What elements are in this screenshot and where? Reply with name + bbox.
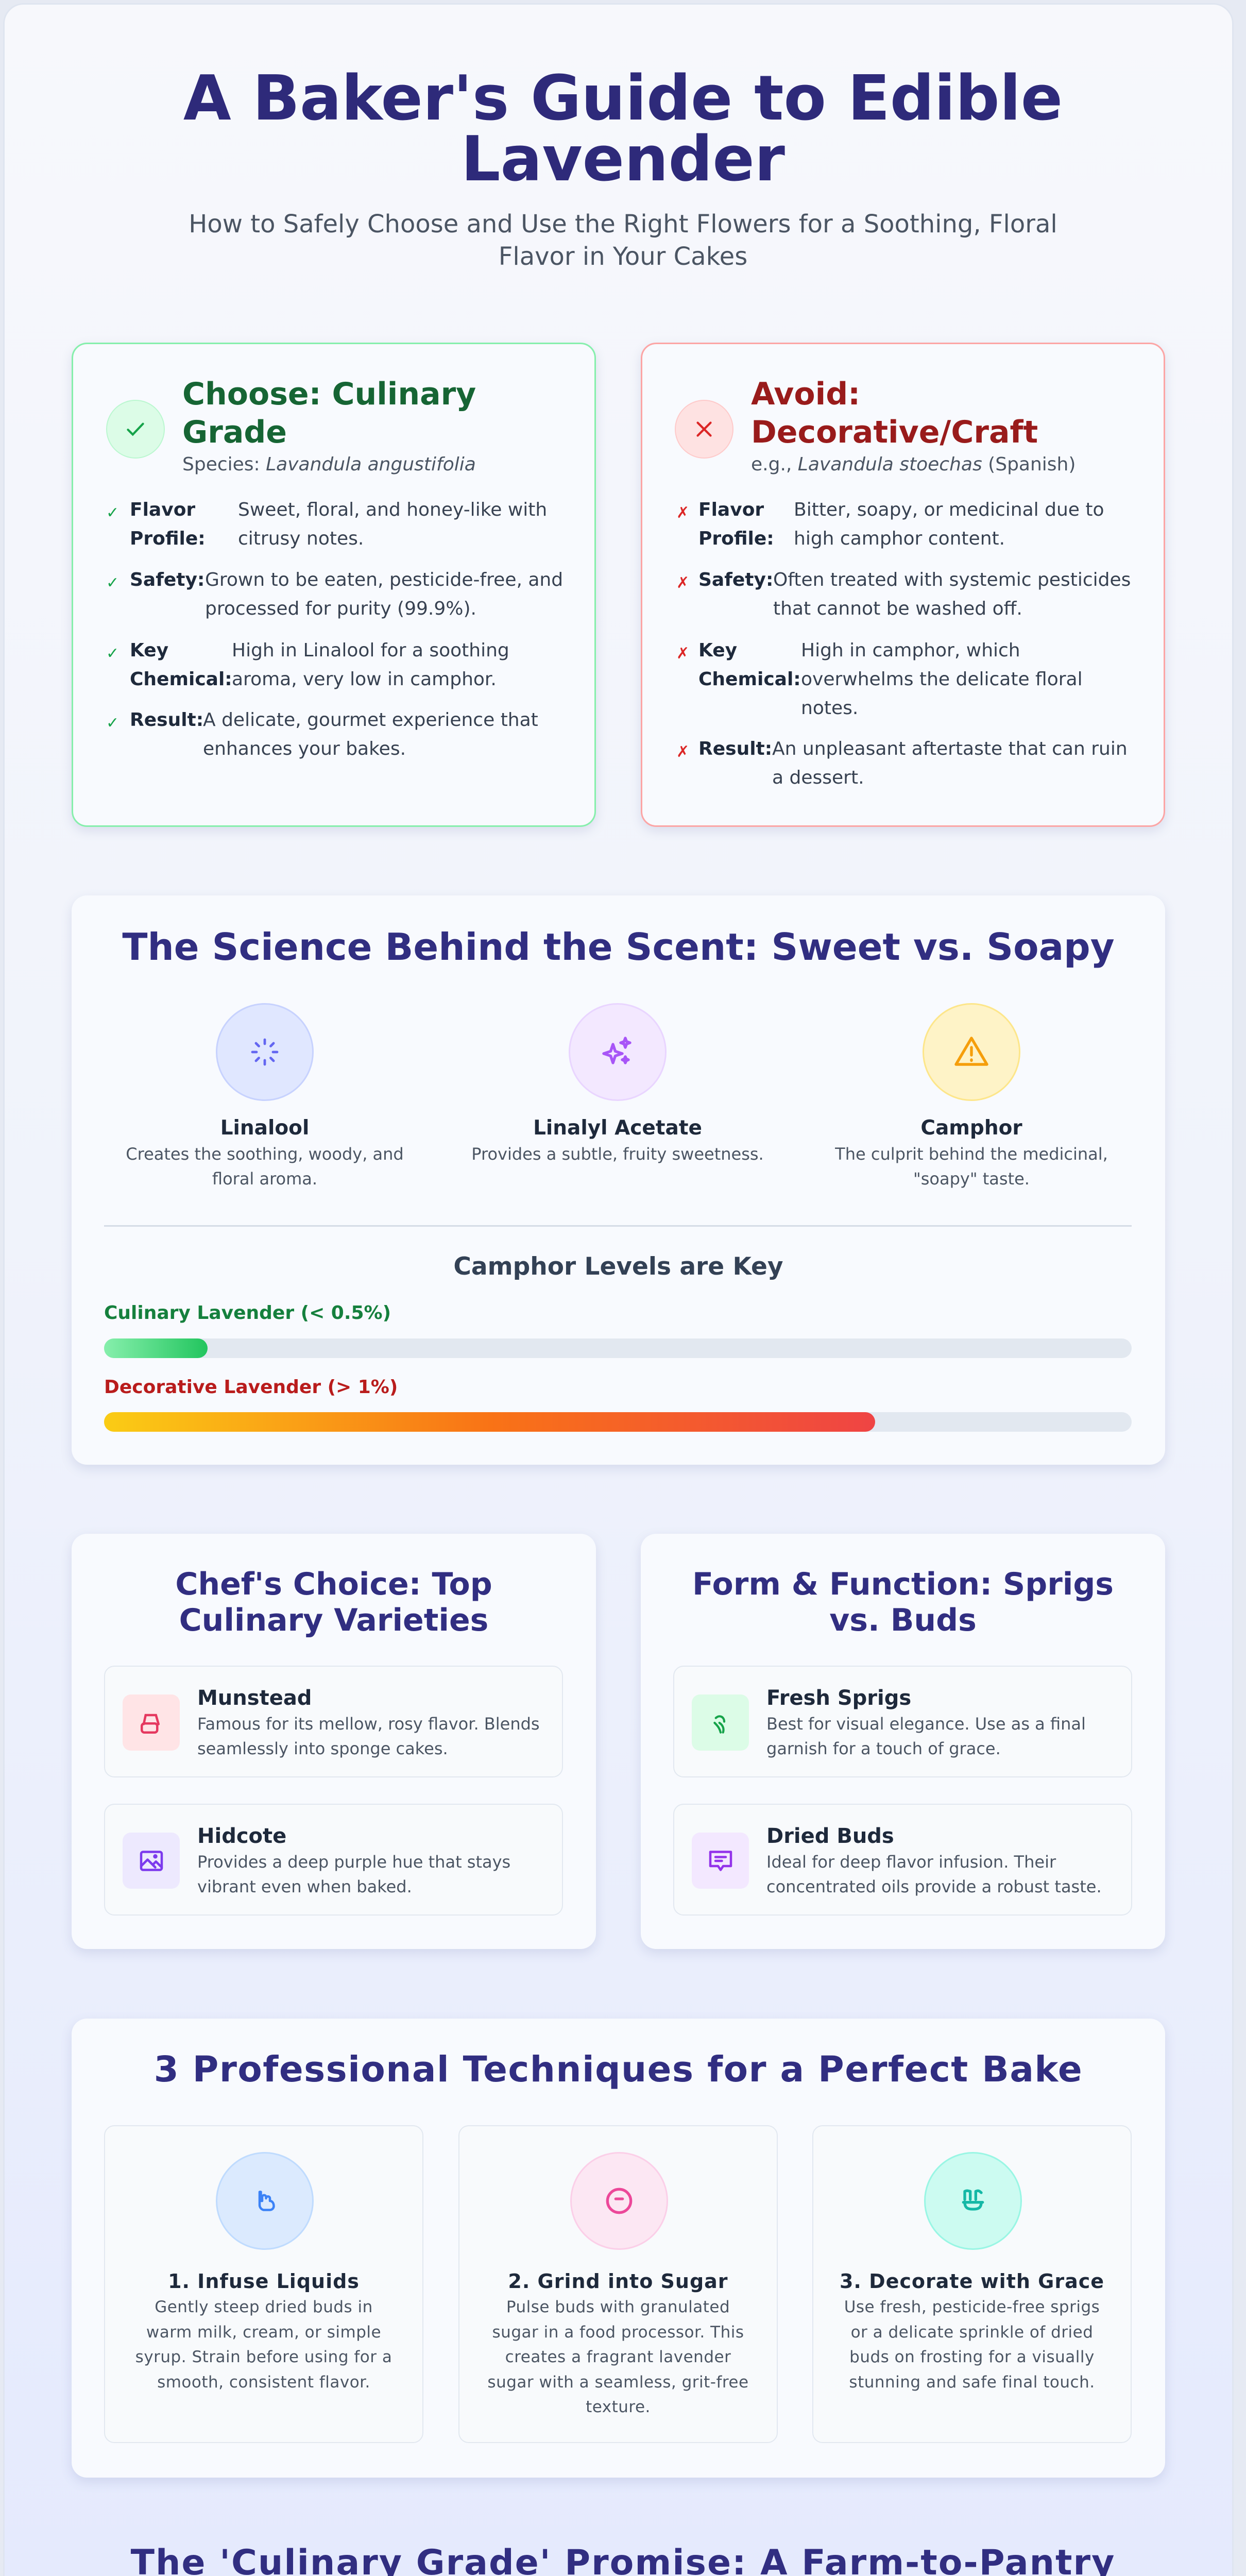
heading: Grade bbox=[182, 414, 287, 450]
technique: infuse liquids: smooth, consistent flavor. bbox=[157, 2373, 370, 2392]
list: decorative attributes: a dessert. bbox=[772, 767, 864, 788]
technique: grind into sugar: 2. Grind into Sugar bbox=[508, 2270, 728, 2293]
panel: avoid decorative bbox=[641, 343, 1165, 827]
list: decorative attributes: ✗ bbox=[676, 743, 689, 761]
icon: hand bbox=[216, 2152, 314, 2250]
panel: science behind the scent: floral aroma. bbox=[212, 1169, 317, 1189]
technique: grind into sugar: sugar in a food processor. This bbox=[492, 2323, 744, 2341]
list: culinary attributes: ✓ bbox=[106, 504, 119, 522]
list: decorative attributes: notes. bbox=[801, 698, 858, 719]
bar chart: camphor levels: Culinary Lavender (< 0.5%) bbox=[104, 1302, 391, 1324]
heading: The Science Behind the Scent: Sweet vs. Soapy bbox=[122, 925, 1115, 969]
technique: infuse liquids: Gently steep dried buds in bbox=[155, 2298, 373, 2316]
panel: science behind the scent: "soapy" taste. bbox=[913, 1169, 1030, 1189]
form: dried buds bbox=[673, 1804, 1132, 1916]
panel: chef's choice varieties bbox=[72, 1534, 596, 1949]
title: A Baker's Guide to Edible bbox=[183, 63, 1063, 134]
list: decorative attributes bbox=[676, 499, 1131, 788]
icon: warning bbox=[923, 1003, 1020, 1101]
variety: munstead bbox=[104, 1666, 563, 1777]
list: culinary attributes: Key bbox=[130, 640, 168, 661]
subtitle: How to Safely Choose and Use the Right Flowers for a Soothing, Floral bbox=[189, 210, 1057, 239]
variety: hidcote: Provides a deep purple hue that stays bbox=[197, 1852, 510, 1872]
heading: Decorative/Craft bbox=[751, 414, 1038, 450]
technique: infuse liquids bbox=[104, 2125, 423, 2443]
heading: 3 Professional Techniques for a Perfect Bake bbox=[154, 2049, 1083, 2090]
list: decorative attributes: overwhelms the delicate floral bbox=[801, 669, 1083, 690]
form: dried buds: concentrated oils provide a robust taste. bbox=[766, 1877, 1102, 1896]
list: decorative attributes: Bitter, soapy, or medicinal due to bbox=[794, 499, 1104, 520]
bar chart: camphor levels: Decorative Lavender (> 1%) bbox=[104, 1377, 398, 1398]
technique: infuse liquids: syrup. Strain before using for a bbox=[135, 2348, 392, 2366]
form: fresh sprigs: garnish for a touch of grace. bbox=[766, 1739, 1001, 1758]
compound: camphor: Camphor bbox=[920, 1116, 1022, 1140]
heading bbox=[182, 376, 476, 450]
species: Species: Lavandula angustifolia bbox=[182, 454, 476, 475]
compound: linalool: Creates the soothing, woody, and bbox=[126, 1144, 404, 1164]
list: decorative attributes: Result: bbox=[698, 738, 772, 759]
list: decorative attributes: High in camphor, which bbox=[801, 640, 1020, 661]
form: dried buds: Ideal for deep flavor infusion. Their bbox=[766, 1852, 1056, 1872]
heading: Culinary Varieties bbox=[179, 1602, 488, 1638]
list: culinary attributes: Chemical: bbox=[130, 669, 232, 690]
form: fresh sprigs: Best for visual elegance. Use as a final bbox=[766, 1714, 1086, 1734]
form: dried buds: Dried Buds bbox=[766, 1824, 894, 1848]
heading bbox=[751, 376, 1038, 450]
icon: message bbox=[692, 1833, 749, 1889]
subtitle bbox=[189, 210, 1057, 271]
list: decorative attributes: Key bbox=[698, 640, 737, 661]
technique: decorate: stunning and safe final touch. bbox=[849, 2373, 1095, 2392]
heading: vs. Buds bbox=[829, 1602, 977, 1638]
list: culinary attributes: Flavor bbox=[130, 499, 195, 520]
bar chart: camphor levels bbox=[104, 1302, 1132, 1432]
icon: image bbox=[123, 1833, 180, 1889]
subtitle: Flavor in Your Cakes bbox=[499, 242, 747, 271]
icon: check bbox=[106, 400, 165, 459]
list: culinary attributes: Sweet, floral, and honey-like with bbox=[238, 499, 547, 520]
list: culinary attributes: citrusy notes. bbox=[238, 528, 364, 549]
variety: munstead: seamlessly into sponge cakes. bbox=[197, 1739, 448, 1758]
variety: hidcote bbox=[104, 1804, 563, 1916]
icon: decorate bbox=[924, 2152, 1022, 2250]
technique: grind into sugar: sugar with a seamless, grit-free bbox=[487, 2373, 749, 2392]
icon: loader bbox=[216, 1003, 314, 1101]
icon: x bbox=[675, 400, 733, 459]
subheading: camphor levels: Camphor Levels are Key bbox=[453, 1252, 783, 1281]
list: culinary attributes bbox=[106, 499, 563, 759]
list: decorative attributes: Often treated with systemic pesticides bbox=[773, 569, 1131, 590]
list: decorative attributes: An unpleasant aftertaste that can ruin bbox=[772, 738, 1128, 759]
list: culinary attributes: processed for purity (99.9%). bbox=[205, 598, 476, 619]
panel: choose culinary grade bbox=[72, 343, 596, 827]
technique: decorate: buds on frosting for a visually bbox=[849, 2348, 1095, 2366]
icon: sparkles bbox=[569, 1003, 667, 1101]
technique: infuse liquids: 1. Infuse Liquids bbox=[168, 2270, 360, 2293]
technique: grind into sugar bbox=[458, 2125, 778, 2443]
title: Lavender bbox=[461, 124, 785, 195]
list: decorative attributes: Chemical: bbox=[698, 669, 801, 690]
compound: linalyl acetate bbox=[471, 1003, 764, 1164]
list: culinary attributes: ✓ bbox=[106, 574, 119, 592]
list: culinary attributes: High in Linalool for a soothing bbox=[232, 640, 509, 661]
heading bbox=[692, 1566, 1114, 1638]
list: decorative attributes: ✗ bbox=[676, 574, 689, 592]
compound: linalyl acetate: Provides a subtle, fruity sweetness. bbox=[471, 1144, 764, 1164]
compound: camphor: The culprit behind the medicinal, bbox=[835, 1144, 1108, 1164]
title bbox=[183, 63, 1063, 195]
list: culinary attributes: aroma, very low in camphor. bbox=[232, 669, 497, 690]
list: culinary attributes: ✓ bbox=[106, 714, 119, 732]
technique: grind into sugar: creates a fragrant lavender bbox=[505, 2348, 731, 2366]
form: fresh sprigs bbox=[673, 1666, 1132, 1777]
form: fresh sprigs: Fresh Sprigs bbox=[766, 1686, 911, 1710]
heading: Form & Function: Sprigs bbox=[692, 1566, 1114, 1602]
list: culinary attributes: Safety: bbox=[130, 569, 204, 590]
compound: linalool: Linalool bbox=[220, 1116, 309, 1140]
list: decorative attributes: ✗ bbox=[676, 645, 689, 663]
list: culinary attributes: Profile: bbox=[130, 528, 206, 549]
technique: infuse liquids: warm milk, cream, or simple bbox=[146, 2323, 381, 2341]
example species: e.g., Lavandula stoechas (Spanish) bbox=[751, 454, 1076, 475]
variety: munstead: Famous for its mellow, rosy flavor. Blends bbox=[197, 1714, 540, 1734]
technique: grind into sugar: texture. bbox=[586, 2398, 651, 2416]
heading: Choose: Culinary bbox=[182, 376, 476, 412]
list: culinary attributes: ✓ bbox=[106, 645, 119, 663]
compound: linalyl acetate: Linalyl Acetate bbox=[533, 1116, 702, 1140]
heading: Avoid: bbox=[751, 376, 860, 412]
list: decorative attributes: Profile: bbox=[698, 528, 774, 549]
list: culinary attributes: A delicate, gourmet experience that bbox=[203, 709, 538, 731]
technique: decorate: or a delicate sprinkle of dried bbox=[851, 2323, 1093, 2341]
panel: professional techniques bbox=[72, 2019, 1165, 2478]
list: decorative attributes: Safety: bbox=[698, 569, 773, 590]
list: decorative attributes: that cannot be washed off. bbox=[773, 598, 1022, 619]
list: decorative attributes: ✗ bbox=[676, 504, 689, 522]
heading bbox=[175, 1566, 492, 1638]
variety: munstead: Munstead bbox=[197, 1686, 312, 1710]
list: culinary attributes: enhances your bakes. bbox=[203, 738, 406, 759]
icon: sprig bbox=[692, 1694, 749, 1751]
technique: decorate bbox=[812, 2125, 1132, 2443]
panel: science behind the scent bbox=[72, 895, 1165, 1465]
list: decorative attributes: Flavor bbox=[698, 499, 764, 520]
icon: munstead bbox=[123, 1694, 180, 1751]
panel: sprigs vs buds bbox=[641, 1534, 1165, 1949]
list: culinary attributes: Grown to be eaten, pesticide-free, and bbox=[205, 569, 563, 590]
variety: hidcote: vibrant even when baked. bbox=[197, 1877, 412, 1896]
technique: grind into sugar: Pulse buds with granulated bbox=[506, 2298, 730, 2316]
heading: Chef's Choice: Top bbox=[175, 1566, 492, 1602]
list: culinary attributes: Result: bbox=[130, 709, 203, 731]
technique: decorate: 3. Decorate with Grace bbox=[840, 2270, 1104, 2293]
compound: camphor bbox=[835, 1003, 1108, 1189]
variety: hidcote: Hidcote bbox=[197, 1824, 286, 1848]
icon: circle minus bbox=[570, 2152, 668, 2250]
compound: linalool bbox=[126, 1003, 404, 1189]
technique: decorate: Use fresh, pesticide-free sprigs bbox=[844, 2298, 1100, 2316]
list: decorative attributes: high camphor content. bbox=[794, 528, 1005, 549]
